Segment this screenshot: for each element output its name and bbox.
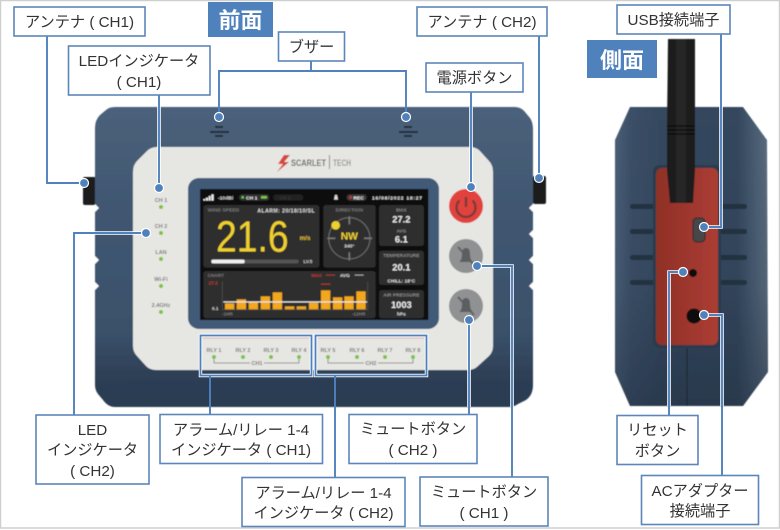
relay highlight: CH1 — [200, 336, 312, 376]
bar chart: AVG — [340, 273, 350, 278]
relay indicators: CH2: RLY 8 — [406, 348, 420, 354]
panel: air pressure: AIR PRESSURE — [383, 292, 420, 298]
panel: direction — [323, 205, 376, 268]
label: relay CH2: アラーム/リレー 1-4 — [255, 485, 392, 502]
status bar: REC — [353, 195, 364, 201]
panel: max and avg: 6.1 — [395, 235, 408, 245]
panel: temperature: 20.1 — [392, 262, 410, 272]
label: LED CH2: ( CH2) — [70, 463, 115, 480]
label: mute CH2: ( CH2 ) — [389, 442, 437, 459]
screen — [200, 189, 428, 320]
buzzer slot: left — [210, 126, 229, 137]
label: LED CH1 — [68, 46, 210, 95]
leader: USB port — [700, 34, 721, 232]
label: LED CH1: ( CH1) — [117, 74, 161, 91]
device body — [95, 107, 533, 407]
relay indicators: CH2: CH2 — [365, 361, 377, 367]
label: power button: 電源ボタン — [437, 70, 512, 87]
label: AC adapter — [642, 476, 758, 524]
relay indicators: CH2 — [318, 338, 424, 367]
panel: direction: DIRECTION — [336, 208, 363, 214]
panel: max and avg: 27.2 — [392, 214, 410, 224]
LED indicators — [152, 198, 171, 314]
relay indicators: CH1 — [203, 338, 309, 367]
LED indicators: CH 2 — [155, 224, 167, 230]
panel: temperature — [379, 251, 424, 285]
panel: air pressure: hPa — [397, 311, 406, 316]
heading: side: 側面 — [600, 48, 644, 73]
label: AC adapter: 接続端子 — [670, 503, 730, 520]
leader: AC adapter — [700, 310, 722, 475]
antenna stub: CH1 — [83, 177, 96, 205]
panel: air pressure — [379, 290, 424, 318]
panel: wind speed: m/s — [300, 235, 311, 242]
side body — [615, 107, 768, 406]
relay indicators: CH1: RLY 1 — [207, 348, 221, 354]
LED indicators: LAN — [155, 250, 167, 256]
label: mute CH1: ミュートボタン — [431, 484, 537, 501]
bar chart: 27.2 — [209, 281, 218, 286]
label: USB port — [617, 5, 730, 34]
bar chart: 6.1 — [212, 306, 219, 311]
label: LED CH2 — [36, 415, 149, 484]
label: buzzer — [278, 32, 344, 61]
label: mute CH2 — [349, 414, 477, 464]
panel: wind speed: 21.6 — [216, 213, 289, 262]
label: antenna CH1 — [14, 7, 145, 36]
relay indicators: CH1: RLY 4 — [292, 348, 307, 354]
relay highlight: CH2 — [316, 336, 426, 376]
leader: mute CH2 — [464, 316, 474, 414]
relay indicators: CH2: RLY 7 — [378, 348, 392, 354]
heading: front: 前面 — [218, 8, 263, 33]
panel: direction: 340° — [344, 244, 354, 250]
relay indicators: CH2: RLY 5 — [321, 348, 335, 354]
label: LED CH2: LED — [78, 422, 107, 439]
bar chart: -1HR — [222, 312, 234, 317]
leader: mute CH1 — [472, 262, 512, 477]
side connector panel — [653, 165, 721, 348]
front device — [83, 107, 546, 407]
antenna — [667, 39, 695, 203]
label: antenna CH2 — [417, 7, 547, 36]
heading: front — [208, 2, 273, 37]
leader: reset button — [669, 268, 688, 415]
panel: max and avg: AVG — [396, 228, 407, 233]
bar chart — [203, 271, 376, 318]
label: relay CH2: インジケータ ( CH2) — [253, 505, 394, 522]
relay indicators: CH1: CH1 — [251, 361, 263, 367]
label: AC adapter: ACアダプター — [651, 483, 749, 500]
panel: max and avg: MAX — [396, 208, 407, 213]
panel: wind speed — [203, 205, 319, 268]
relay indicators: CH1: RLY 3 — [264, 348, 278, 354]
bar chart: CHART — [208, 273, 224, 278]
label: antenna CH1: アンテナ ( CH1) — [25, 14, 134, 31]
label: reset button: ボタン — [635, 443, 680, 460]
buzzer slot: right — [399, 126, 418, 137]
mute button: CH2 — [449, 289, 483, 323]
panel: wind speed: WIND SPEED — [208, 208, 240, 214]
label: relay CH2 — [242, 478, 405, 526]
leader: power button — [466, 92, 476, 192]
LED indicators: 2.4GHz — [152, 303, 171, 309]
logo — [277, 155, 351, 172]
panel: temperature: TEMPERATURE — [383, 253, 420, 259]
leader: buzzer — [214, 61, 410, 122]
status bar — [203, 194, 422, 201]
side grooves — [630, 204, 747, 285]
label: mute CH1 — [420, 477, 548, 526]
mute button: CH1 — [449, 239, 483, 273]
AC adapter jack — [686, 308, 702, 324]
LED indicators: Wi-Fi — [154, 277, 168, 283]
logo: TECH — [333, 158, 351, 168]
leader: relay CH1 — [209, 376, 211, 414]
panel: direction: NW — [341, 232, 358, 243]
label: reset button: リセット — [627, 422, 688, 439]
label: relay CH1: インジケータ ( CH1) — [171, 442, 311, 459]
panel: air pressure: 1003 — [391, 300, 412, 310]
label: reset button — [617, 416, 698, 464]
label: buzzer: ブザー — [289, 38, 334, 56]
USB port — [693, 218, 705, 242]
status bar: CH 1 — [246, 195, 258, 201]
panel: max and avg — [379, 205, 424, 246]
side seam — [686, 345, 688, 406]
reset hole — [689, 269, 697, 277]
label: mute CH2: ミュートボタン — [360, 421, 466, 438]
power button — [449, 189, 483, 223]
leader: LED CH2 — [74, 228, 150, 415]
status bar: CH 2 — [279, 195, 291, 201]
status bar: 16/08/2022 18:27 — [372, 195, 422, 201]
leader: LED CH1 — [154, 95, 164, 192]
relay indicators: CH2: RLY 6 — [350, 348, 364, 354]
relay indicators: CH1: RLY 2 — [236, 348, 250, 354]
status bar: -10dBi — [218, 195, 234, 201]
screen bezel — [188, 178, 439, 329]
side device — [615, 39, 768, 406]
LED indicators: CH 1 — [155, 198, 167, 204]
panel: wind speed: LV.5 — [303, 259, 313, 264]
logo: SCARLET — [291, 158, 326, 168]
heading: side — [587, 40, 657, 78]
leader: antenna CH1 — [47, 36, 88, 188]
leader: relay CH2 — [334, 376, 336, 477]
label: relay CH1: アラーム/リレー 1-4 — [173, 422, 309, 439]
front panel — [133, 147, 493, 370]
panel: temperature: CHILL: 18°C — [387, 278, 416, 284]
label: antenna CH2: アンテナ ( CH2) — [427, 14, 537, 31]
label: relay CH1 — [160, 414, 322, 464]
label: mute CH1: ( CH1 ) — [460, 505, 508, 522]
bar chart: -12HR — [352, 312, 366, 317]
bar chart: MAX — [311, 273, 323, 278]
label: LED CH2: インジケータ — [47, 442, 138, 459]
panel: wind speed: ALARM: 20/18/10/SL — [257, 209, 315, 215]
antenna stub: CH2 — [533, 176, 546, 204]
leader: antenna CH2 — [534, 36, 544, 182]
label: USB port: USB接続端子 — [628, 12, 719, 29]
label: power button — [426, 63, 523, 92]
label: LED CH1: LEDインジケータ — [79, 53, 199, 70]
